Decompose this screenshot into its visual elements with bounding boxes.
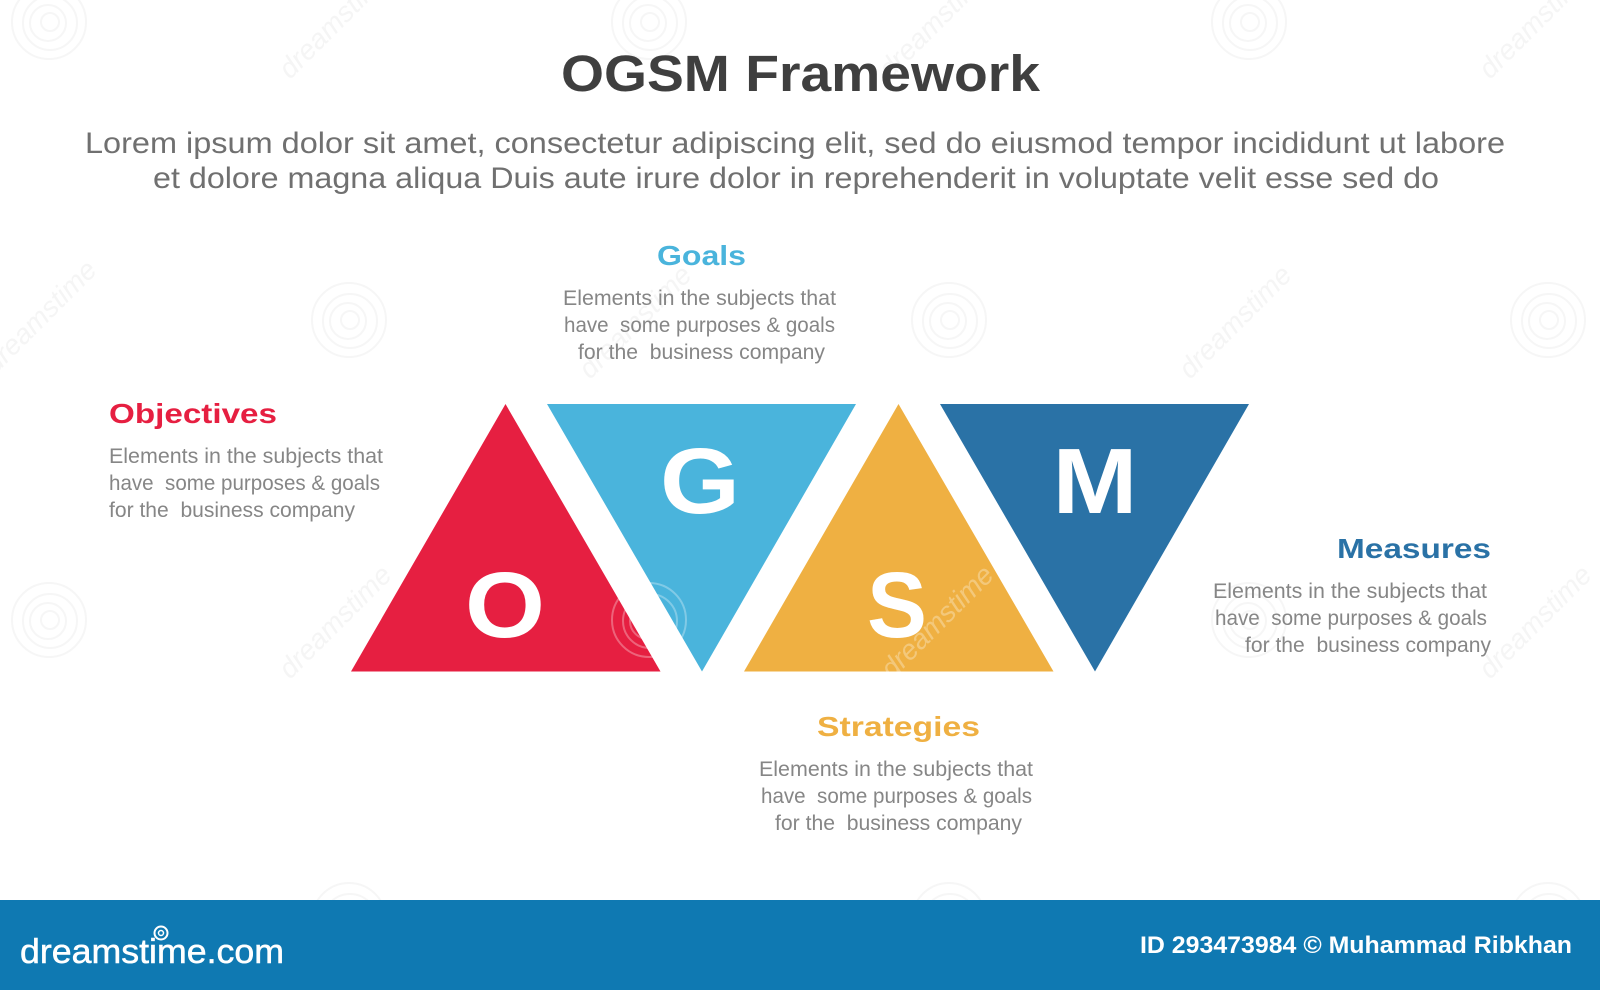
text block: goals: have some purposes & goals: [564, 313, 835, 337]
panel: objectives: [109, 398, 383, 522]
triangle: S: [744, 404, 1054, 672]
text block: measures: for the business company: [1245, 633, 1491, 657]
text block: measures: [1213, 579, 1491, 657]
triangle: M: M: [1052, 429, 1138, 533]
triangle: S: S: [867, 553, 927, 657]
foreground watermark: [612, 559, 1000, 684]
text block: strategies: have some purposes & goals: [761, 784, 1032, 808]
title: OGSM Framework: [561, 45, 1041, 102]
text block: objectives: [109, 444, 383, 522]
triangle: G: [547, 404, 856, 672]
background watermark: dreamstime: [572, 259, 698, 384]
text block: measures: have some purposes & goals: [1215, 606, 1487, 630]
triangle: O: [351, 404, 660, 672]
text block: objectives: Elements in the subjects that: [109, 444, 383, 468]
heading: measures: Measures: [1337, 533, 1491, 564]
subtitle text block: [85, 127, 1505, 195]
text block: measures: Elements in the subjects that: [1213, 579, 1487, 603]
background watermark: dreamstime: [1172, 259, 1298, 384]
triangle: O: O: [465, 553, 545, 657]
panel: goals: [563, 240, 836, 364]
foreground watermark: dreamstime: [874, 559, 1000, 684]
panel: measures: [1213, 533, 1491, 657]
subtitle text block: Lorem ipsum dolor sit amet, consectetur adipiscing elit, sed do eiusmod tempor incididunt ut labore: [85, 127, 1505, 160]
triangle: G: G: [660, 429, 740, 533]
heading: goals: Goals: [657, 240, 746, 271]
heading: strategies: Strategies: [817, 711, 980, 742]
text block: strategies: for the business company: [775, 811, 1022, 835]
text block: objectives: have some purposes & goals: [109, 471, 380, 495]
text block: strategies: [759, 757, 1033, 835]
triangle chart: [351, 404, 1249, 672]
subtitle text block: et dolore magna aliqua Duis aute irure dolor in reprehenderit in voluptate velit esse sed do: [153, 162, 1439, 195]
panel: strategies: [759, 711, 1033, 835]
triangle: M: [940, 404, 1249, 672]
text block: goals: [563, 286, 836, 364]
logo: dreamstime.com: [20, 933, 284, 971]
image credit: ID 293473984 © Muhammad Ribkhan: [1140, 932, 1572, 959]
text block: goals: Elements in the subjects that: [563, 286, 836, 310]
text block: goals: for the business company: [578, 340, 825, 364]
background watermark: dreamstime: [1472, 559, 1598, 684]
footer bar: [0, 900, 1600, 990]
text block: strategies: Elements in the subjects that: [759, 757, 1033, 781]
text block: objectives: for the business company: [109, 498, 355, 522]
heading: objectives: Objectives: [109, 398, 277, 429]
background watermark: dreamstime: [272, 559, 398, 684]
